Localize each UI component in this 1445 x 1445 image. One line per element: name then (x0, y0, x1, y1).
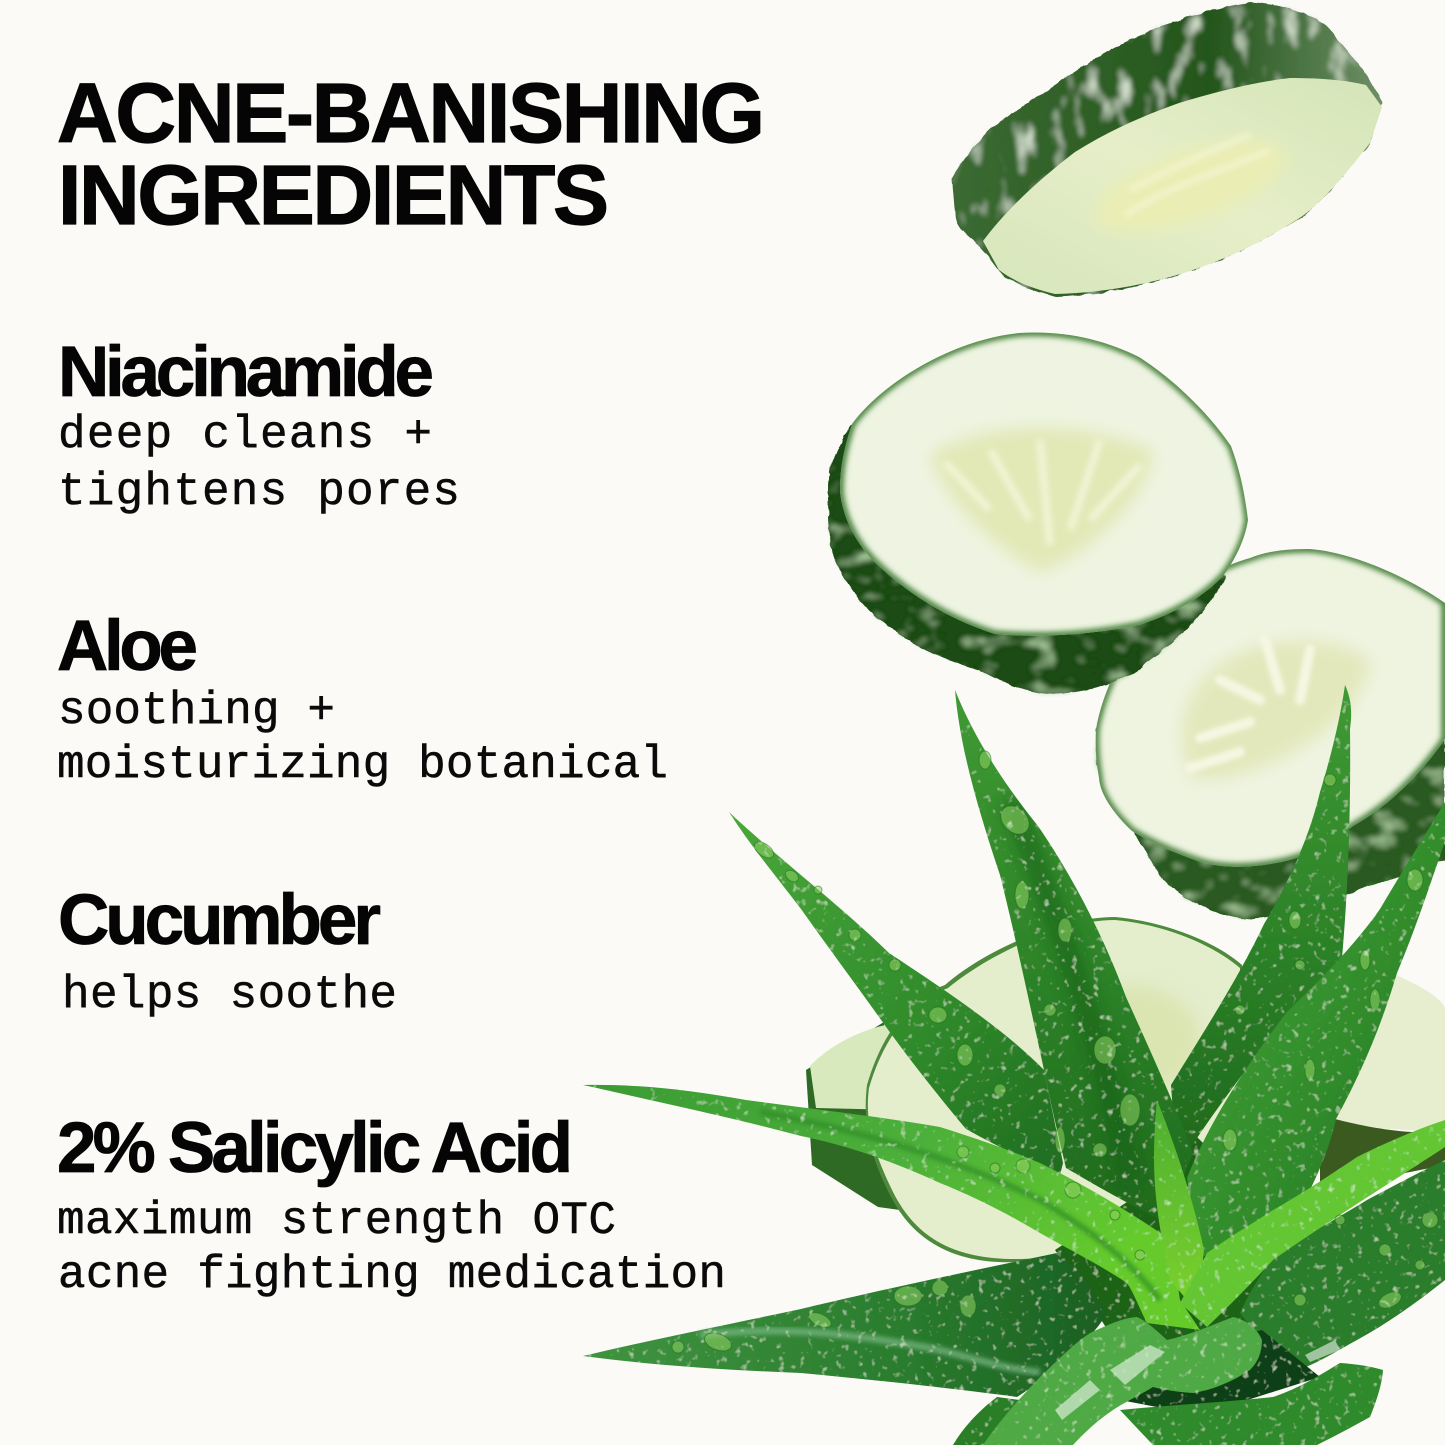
ingredient: cucumber (58, 881, 397, 1021)
cucumber slice: lower left (806, 1022, 900, 1210)
ingredient: salicylic acid: maximum strength OTC (57, 1195, 616, 1247)
shadow: plant core (1055, 1130, 1270, 1350)
highlight: long leaf ridge (760, 1112, 1160, 1300)
cucumber slice: right (1090, 540, 1445, 919)
title (57, 66, 765, 242)
leaf: bottom right (1120, 1363, 1383, 1445)
ingredient: niacinamide: deep cleans + (58, 409, 432, 461)
cucumber slice: middle (828, 325, 1255, 694)
leaf: right diagonal (1187, 802, 1445, 1260)
aloe plant (583, 685, 1445, 1445)
leaf: tall center (955, 690, 1193, 1222)
ingredient: niacinamide: tightens pores (58, 466, 460, 518)
title: ACNE-BANISHING (57, 66, 765, 160)
ingredient: niacinamide (58, 333, 460, 518)
leaf: lower right dark (1240, 1160, 1445, 1373)
ingredient: cucumber: Cucumber (58, 881, 381, 960)
cucumber slice: top (952, 2, 1382, 297)
cucumber slice: center (866, 917, 1243, 1262)
water droplets (672, 751, 1438, 1420)
ingredient: niacinamide: Niacinamide (58, 333, 434, 412)
leaf: curled bottom (983, 1317, 1262, 1445)
ingredient: aloe: moisturizing botanical (57, 739, 668, 791)
leaf: small center bright (1154, 1100, 1204, 1300)
ingredient: salicylic acid: acne fighting medication (58, 1249, 726, 1301)
leaf: back left (729, 812, 1063, 1175)
ingredient: cucumber: helps soothe (62, 969, 397, 1021)
leaf: lower left dark (583, 1253, 1107, 1397)
highlight: lower left leaf sheen (700, 1331, 1040, 1372)
shadow: center leaf (1010, 800, 1130, 1180)
ingredient: aloe: soothing + (58, 685, 335, 737)
ingredient: salicylic acid: 2% Salicylic Acid (57, 1109, 573, 1188)
ingredient: aloe: Aloe (57, 607, 198, 686)
ingredient: aloe (57, 607, 668, 791)
leaf: tall right (1171, 685, 1351, 1153)
shadow: under curled leaf (1120, 1330, 1320, 1415)
leaf: long bright left (583, 1085, 1200, 1330)
title: INGREDIENTS (58, 148, 609, 242)
leaf: bright right (1180, 1120, 1445, 1327)
cucumber slice: lower right (1300, 973, 1445, 1190)
ingredient: salicylic acid (57, 1109, 726, 1301)
leaf: small back bottom (953, 1397, 1100, 1445)
